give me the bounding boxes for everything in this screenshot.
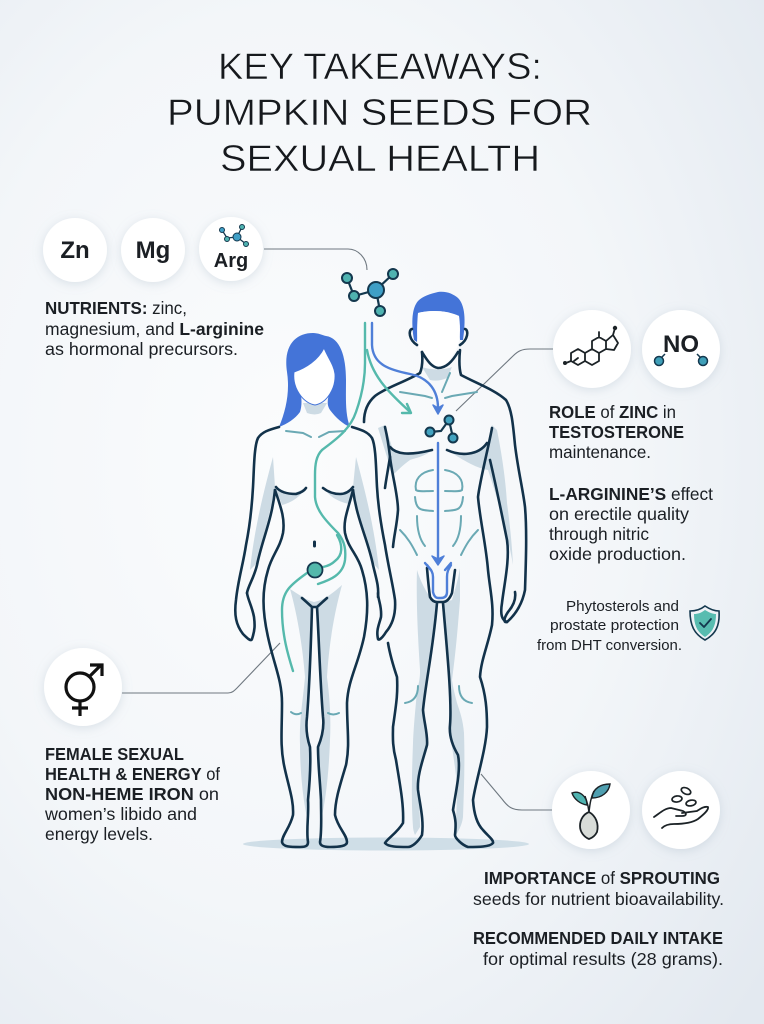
- man groin detail: [425, 563, 451, 598]
- leader line: female health: [122, 643, 280, 693]
- text: l-arginine effect: on erectile quality: [549, 504, 689, 524]
- text: nutrients: magnesium, and L-arginine: [45, 319, 264, 339]
- text: nutrients: NUTRIENTS: zinc,: [45, 298, 187, 318]
- icon: magnesium: Mg: [136, 237, 170, 264]
- icon: nitric oxide: NO: [663, 331, 699, 358]
- ground shadow: [243, 838, 529, 850]
- leader line: arginine to molecule: [264, 249, 367, 270]
- icon: gender symbol: [44, 648, 122, 726]
- text: phytosterols: [537, 599, 682, 654]
- icon: arginine: [199, 217, 263, 281]
- text: phytosterols: prostate protection: [550, 618, 679, 634]
- text: sprouting: seeds for nutrient bioavailability.: [473, 889, 724, 909]
- title: KEY TAKEAWAYS:: [218, 46, 542, 87]
- woman figure: [235, 333, 395, 847]
- text: recommended daily intake: RECOMMENDED DAILY INTAKE: [473, 928, 723, 948]
- text: sprouting: IMPORTANCE of SPROUTING: [484, 868, 720, 888]
- text: l-arginine effect: oxide production.: [549, 544, 686, 564]
- text: nutrients: [45, 298, 264, 359]
- teal nutrient pathway: [282, 323, 411, 671]
- leader line: sprouting: [481, 774, 552, 810]
- text: role of zinc: maintenance.: [549, 442, 651, 462]
- man outline: [364, 329, 526, 847]
- text: role of zinc: TESTOSTERONE: [549, 422, 684, 442]
- icon: zinc: Zn: [60, 237, 90, 264]
- woman collar and knee details: [286, 431, 345, 714]
- icon: shield: [690, 606, 719, 640]
- text: sprouting: [473, 868, 724, 909]
- icon: arginine: Arg: [214, 250, 248, 272]
- title: [167, 46, 592, 179]
- man muscle details: [400, 373, 478, 703]
- woman hair: [279, 333, 350, 427]
- text: l-arginine effect: [549, 484, 713, 564]
- icon: hand with seeds: [642, 771, 720, 849]
- text: role of zinc: ROLE of ZINC in: [549, 402, 676, 422]
- small molecule on chest: [426, 416, 458, 442]
- man figure: [364, 292, 526, 847]
- title: PUMPKIN SEEDS FOR: [167, 92, 592, 133]
- blue nutrient pathway: [372, 323, 444, 565]
- icon: steroid molecule: [553, 310, 631, 388]
- title: SEXUAL HEALTH: [220, 138, 540, 179]
- leader line: testosterone: [456, 349, 553, 411]
- text: nutrients: as hormonal precursors.: [45, 339, 238, 359]
- text: female sexual health: HEALTH & ENERGY of: [45, 764, 220, 784]
- text: phytosterols: from DHT conversion.: [537, 638, 682, 654]
- text: role of zinc: [549, 402, 684, 462]
- text: female sexual health: NON-HEME IRON on: [45, 784, 219, 804]
- text: recommended daily intake: for optimal results (28 grams).: [483, 949, 723, 969]
- man body shading: [378, 367, 513, 837]
- icon: nitric oxide: [642, 310, 720, 388]
- icon: zinc: [43, 218, 107, 282]
- text: female sexual health: [44, 744, 220, 844]
- woman face: [294, 348, 335, 405]
- woman outline: [235, 427, 395, 847]
- text: l-arginine effect: through nitric: [549, 524, 649, 544]
- text: female sexual health: FEMALE SEXUAL: [45, 744, 184, 764]
- text: female sexual health: women’s libido and: [44, 804, 197, 824]
- icon: sprouting seed: [552, 771, 630, 849]
- text: phytosterols: Phytosterols and: [566, 599, 679, 615]
- large molecule above figures: [342, 269, 398, 316]
- man hair: [412, 292, 465, 342]
- woman body shading: [250, 403, 379, 820]
- text: l-arginine effect: L-ARGININE’S effect: [549, 484, 713, 504]
- icon: magnesium: [121, 218, 185, 282]
- text: recommended daily intake: [473, 928, 723, 969]
- text: female sexual health: energy levels.: [45, 824, 153, 844]
- man face: [417, 311, 460, 368]
